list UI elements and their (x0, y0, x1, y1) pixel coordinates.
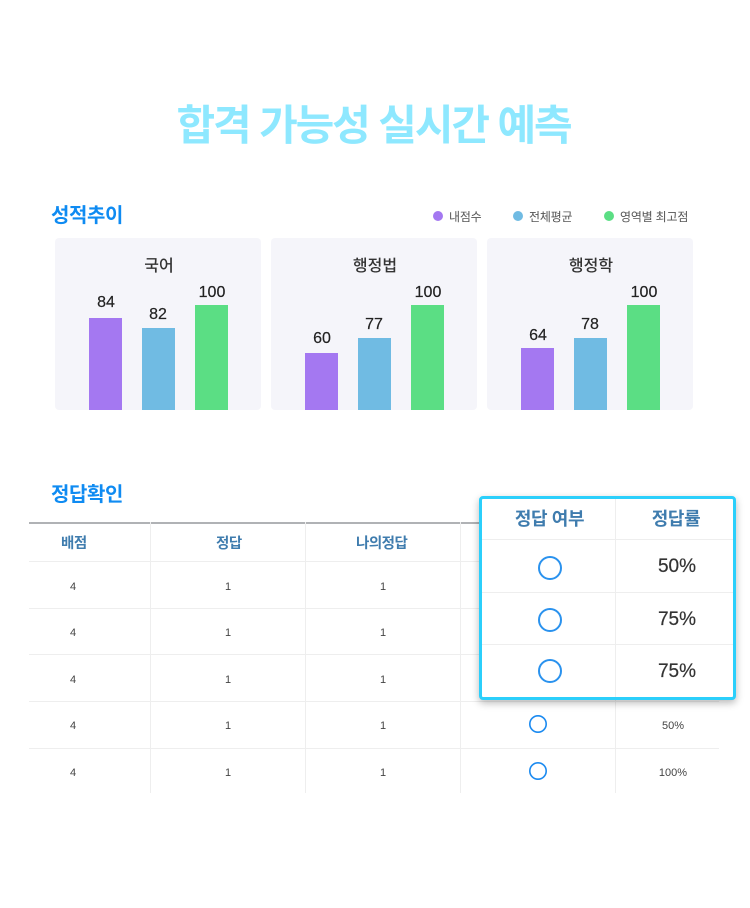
table header: my answer: 나의정답 (356, 536, 407, 552)
table rows: points, answer, my answer: 1 (380, 674, 386, 686)
bar 84 (89, 318, 122, 410)
table rows: points, answer, my answer: 1 (225, 720, 231, 732)
bar 78 (574, 338, 607, 410)
table rows: points, answer, my answer: 1 (380, 581, 386, 593)
value label 100: 100 (415, 284, 441, 301)
panel: Administrative law (271, 238, 477, 410)
heading: score trend: 성적추이 (51, 205, 123, 227)
header: correct rate: 정답률 (652, 509, 700, 529)
rate row 5: 100% (659, 767, 687, 779)
table rows: points, answer, my answer: 1 (225, 674, 231, 686)
icon: circle 3 (538, 659, 562, 683)
table rows: points, answer, my answer: 1 (380, 627, 386, 639)
value label 84: 84 (97, 294, 115, 311)
table rows: points, answer, my answer: 1 (225, 581, 231, 593)
value label 82: 82 (149, 306, 167, 323)
legend label: top score: 영역별 최고점 (620, 210, 688, 224)
title: 합격 가능성 실시간 예측 (176, 102, 571, 149)
table rows: points, answer, my answer (70, 581, 386, 779)
value label 78: 78 (581, 316, 599, 333)
rate row 4: 50% (662, 720, 684, 732)
table rows: points, answer, my answer: 4 (70, 720, 76, 732)
rate 50%: 50% (658, 556, 696, 577)
table rows: points, answer, my answer: 1 (380, 767, 386, 779)
bar 100 (411, 305, 444, 410)
icon: circle 2 (538, 608, 562, 632)
table rows: points, answer, my answer: 1 (380, 720, 386, 732)
value label 77: 77 (365, 316, 383, 333)
legend dot: my score (433, 211, 443, 221)
panel: Korean (55, 238, 261, 410)
icon: correct circle row 5 (529, 762, 547, 780)
bar 82 (142, 328, 175, 410)
legend label: overall average: 전체평균 (529, 210, 572, 224)
legend dot: top score (604, 211, 614, 221)
rate 75%: 75% (658, 609, 696, 630)
value label 60: 60 (313, 330, 331, 347)
bar 100 (195, 305, 228, 410)
legend label: my score: 내점수 (449, 210, 482, 224)
value label 100: 100 (631, 284, 657, 301)
subject name: 행정학 (569, 258, 613, 275)
bar 60 (305, 353, 338, 410)
icon: circle 1 (538, 556, 562, 580)
table rows: points, answer, my answer: 1 (225, 627, 231, 639)
table: answers (29, 522, 719, 793)
panel: Public administration (487, 238, 693, 410)
subject name: 국어 (144, 258, 174, 275)
callout: magnified result columns (479, 496, 736, 700)
table rows: points, answer, my answer: 4 (70, 674, 76, 686)
bar 64 (521, 348, 554, 410)
header: correctness: 정답 여부 (515, 509, 584, 529)
table header: answer: 정답 (216, 536, 242, 552)
table header: points: 배점 (61, 536, 87, 552)
rate 75%: 75% (658, 661, 696, 682)
icon: correct circle row 4 (529, 715, 547, 733)
bar 77 (358, 338, 391, 410)
table rows: points, answer, my answer: 1 (225, 767, 231, 779)
subject name: 행정법 (353, 258, 397, 275)
legend dot: overall average (513, 211, 523, 221)
bar 100 (627, 305, 660, 410)
value label 100: 100 (199, 284, 225, 301)
heading: answer check: 정답확인 (51, 484, 123, 506)
table rows: points, answer, my answer: 4 (70, 581, 76, 593)
table rows: points, answer, my answer: 4 (70, 627, 76, 639)
value label 64: 64 (529, 327, 547, 344)
table rows: points, answer, my answer: 4 (70, 767, 76, 779)
